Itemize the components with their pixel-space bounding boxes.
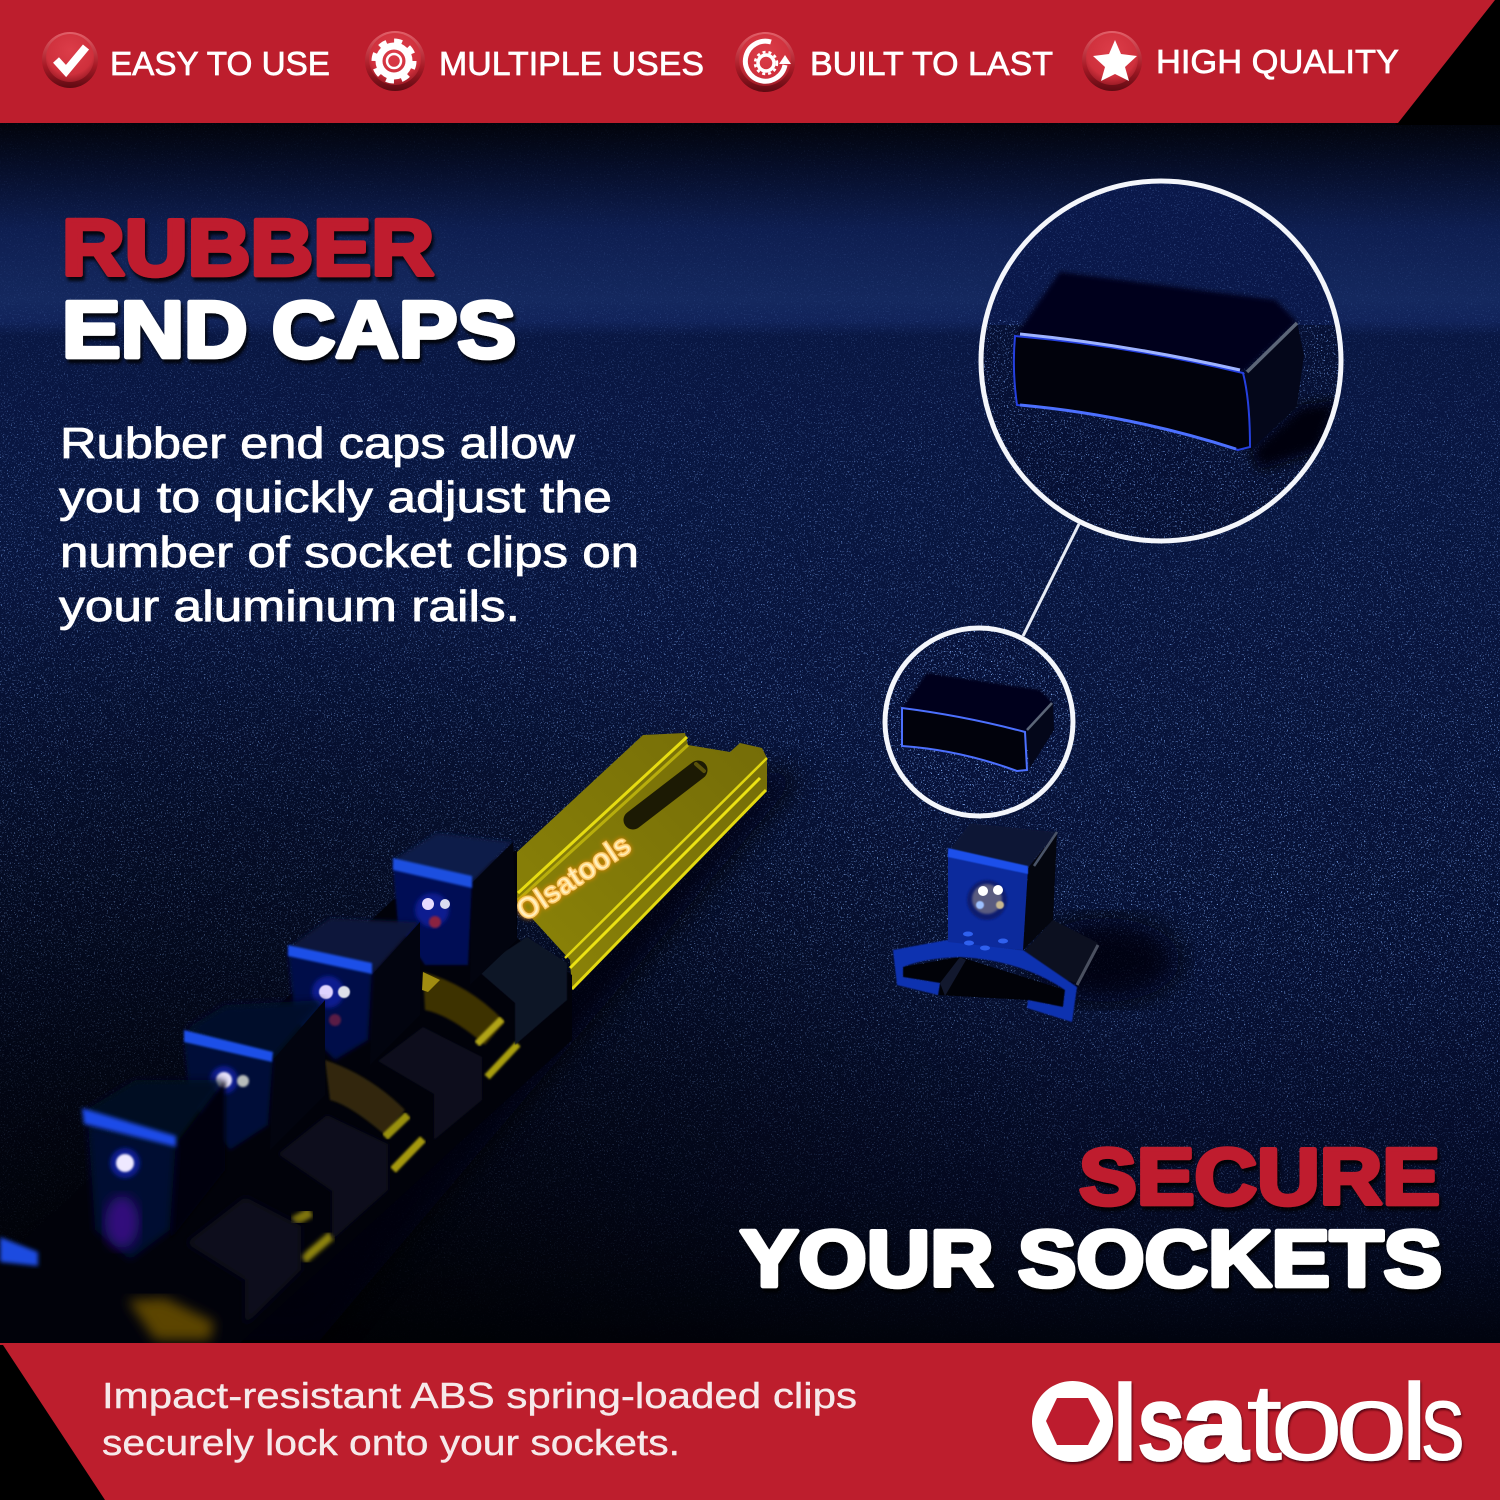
feature: easy to use — [42, 32, 330, 88]
logo: Olsatools: tool — [1246, 1360, 1429, 1484]
clip base ring — [893, 940, 1077, 1022]
clip head — [948, 823, 1057, 868]
cap front face — [1014, 336, 1250, 450]
zoom connector line — [1023, 524, 1079, 636]
rail shadow — [200, 770, 800, 1340]
clip 4 — [82, 1080, 225, 1260]
footer text: Impact-resistant ABS spring-loaded clips — [102, 1375, 857, 1416]
clip arch interior — [903, 957, 1065, 1007]
heading: secure your sockets: YOUR SOCKETS — [740, 1214, 1442, 1303]
clip 1 — [393, 833, 517, 985]
logo: Olsatools: s — [1421, 1361, 1465, 1484]
logo: Olsatools — [1032, 1360, 1465, 1484]
body text: rubber end caps: Rubber end caps allow — [60, 419, 575, 468]
body text: rubber end caps: you to quickly adjust the — [59, 473, 612, 522]
clip lower blocks — [186, 937, 567, 1325]
heading: rubber end caps: END CAPS — [62, 285, 516, 374]
feature: built to last — [735, 32, 1053, 92]
logo: Olsatools: O — [1035, 1361, 1110, 1484]
footer text — [102, 1375, 857, 1463]
photo: socket rail with clips — [0, 733, 800, 1343]
black clip body along rail — [0, 850, 572, 1343]
logo: Olsatools: ls — [1113, 1362, 1185, 1483]
small cap top face — [902, 673, 1053, 732]
clip 2 — [288, 918, 420, 1065]
photo: single socket clip — [893, 823, 1180, 1022]
heading: rubber end caps — [62, 203, 516, 374]
clip shadow — [1030, 918, 1180, 1002]
heading: secure your sockets — [740, 1132, 1442, 1303]
cap shadow — [1250, 400, 1340, 470]
footer band — [0, 1343, 1500, 1500]
feature: multiple uses: MULTIPLE USES — [439, 45, 704, 82]
cap highlight — [1020, 334, 1240, 370]
body text: rubber end caps: your aluminum rails. — [59, 582, 520, 631]
body text: rubber end caps — [59, 419, 639, 631]
cap side face — [1243, 322, 1304, 450]
clip ball bearing — [967, 880, 1007, 920]
clip embossed marks — [963, 932, 1008, 950]
small cap side face — [1025, 703, 1054, 768]
body text: rubber end caps: number of socket clips on — [60, 528, 639, 577]
icon: gear — [365, 31, 425, 91]
feature: easy to use: EASY TO USE — [110, 45, 330, 82]
icon: star — [1082, 31, 1142, 91]
logo: Olsatools: a — [1182, 1362, 1249, 1483]
footer text: securely lock onto your sockets. — [102, 1422, 680, 1463]
feature: multiple uses — [365, 31, 704, 91]
header band — [0, 0, 1500, 125]
heading: secure your sockets: SECURE — [1079, 1132, 1440, 1221]
feature: high quality: HIGH QUALITY — [1156, 43, 1399, 80]
clip right leg — [1023, 920, 1098, 985]
icon: gear in arrow — [735, 32, 795, 92]
rail engraved logo: Olsatools — [509, 827, 637, 928]
clip left leg edge — [940, 957, 966, 996]
small cap front face — [902, 708, 1027, 771]
cap top face — [1015, 272, 1297, 372]
feature: high quality — [1082, 31, 1399, 91]
heading: rubber end caps: RUBBER — [62, 203, 434, 292]
clip 3 — [184, 1000, 325, 1150]
clip 5, cropped at left edge — [0, 1237, 38, 1266]
large zoom circle — [980, 180, 1342, 542]
gold reflections between clips — [128, 972, 518, 1340]
feature: built to last: BUILT TO LAST — [810, 45, 1053, 82]
small target circle — [885, 628, 1075, 818]
icon: check mark — [42, 32, 98, 88]
yellow aluminum rail — [517, 733, 767, 990]
